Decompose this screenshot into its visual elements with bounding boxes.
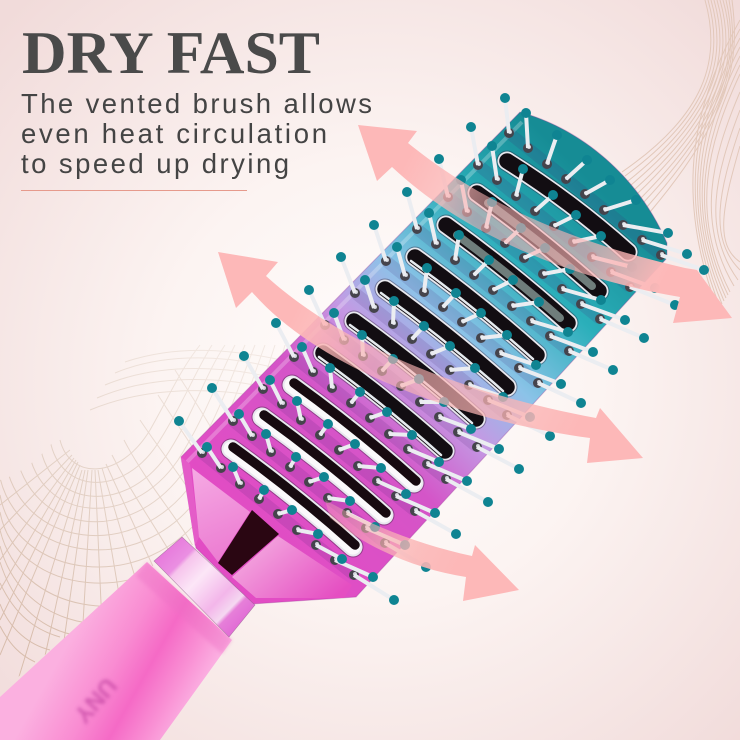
right facet [232,536,352,598]
decorative mesh lines left [0,345,290,680]
brush head [181,112,667,604]
handle blurred logo: UNY [68,672,122,728]
description text: The vented brush allows [21,88,372,119]
left flange [181,457,199,546]
brush handle [0,562,232,740]
description text: to speed up drying [21,148,289,179]
pin base highlights [203,132,662,574]
pin balls [179,98,704,600]
head edge highlight [187,122,522,462]
neck collar [154,537,255,637]
left facet [192,468,250,562]
description text [21,88,372,179]
airflow arrow middle [218,252,643,463]
description text: even heat circulation [21,118,327,149]
row shading [202,133,661,575]
vent slots [231,161,628,547]
pin bases [202,132,662,575]
pin shafts [179,98,704,600]
underline [21,190,247,191]
title: DRY FAST [22,20,320,86]
handle shadow band [136,562,232,654]
dark throat [218,510,279,575]
airflow arrow top [358,125,732,323]
airflow arrow bottom [325,500,519,601]
decorative hair strands right [622,0,740,310]
